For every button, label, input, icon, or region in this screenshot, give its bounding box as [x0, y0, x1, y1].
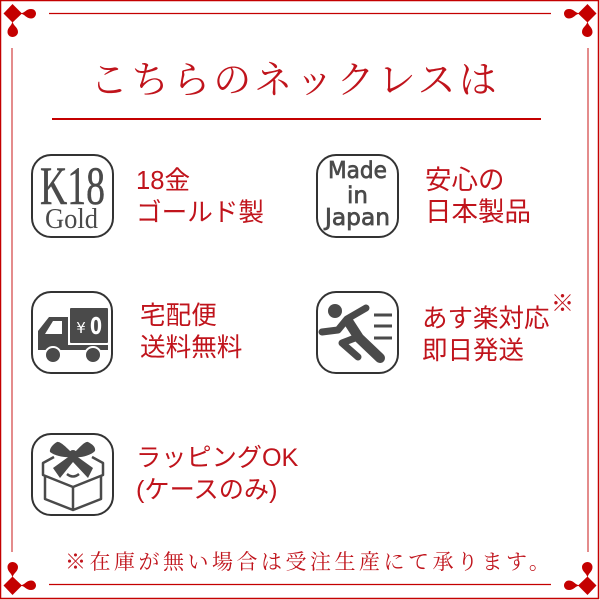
text: wrapping: (ケースのみ) [136, 476, 277, 504]
text: wrapping: ラッピングOK [136, 444, 298, 472]
icon: K18 Gold [31, 154, 114, 238]
text: wrapping [136, 444, 298, 504]
text: made in japan: 安心の [425, 165, 504, 195]
footnote: ※在庫が無い場合は受注生産にて承ります。 [65, 550, 553, 574]
text: free shipping: 送料無料 [140, 334, 242, 362]
text: free shipping [140, 302, 242, 362]
text: free shipping: 宅配便 [140, 302, 217, 330]
note mark: ※ [551, 290, 574, 316]
text: 18 gold [136, 167, 264, 227]
icon: Made in Japan [316, 154, 399, 238]
text: made in japan [425, 165, 531, 227]
text: next-day shipping: あす楽対応 [422, 305, 550, 333]
icon: running person [316, 291, 399, 374]
icon: gift box [31, 433, 114, 516]
text: 18 gold: ゴールド製 [136, 199, 264, 227]
icon: delivery truck: 0 [90, 314, 102, 340]
icon: Made in Japan: in [347, 183, 368, 209]
text: 18 gold: 18金 [136, 167, 190, 195]
text: next-day shipping [422, 305, 550, 365]
icon: K18 Gold: Gold [45, 203, 98, 235]
icon: Made in Japan: Japan [323, 205, 390, 231]
icon: Made in Japan: Made [328, 158, 387, 184]
icon: delivery truck: ¥ [76, 319, 86, 337]
text: made in japan: 日本製品 [425, 197, 531, 227]
icon: delivery truck [31, 291, 113, 374]
title: こちらのネックレスは [90, 60, 500, 102]
text: next-day shipping: 即日発送 [422, 337, 524, 365]
